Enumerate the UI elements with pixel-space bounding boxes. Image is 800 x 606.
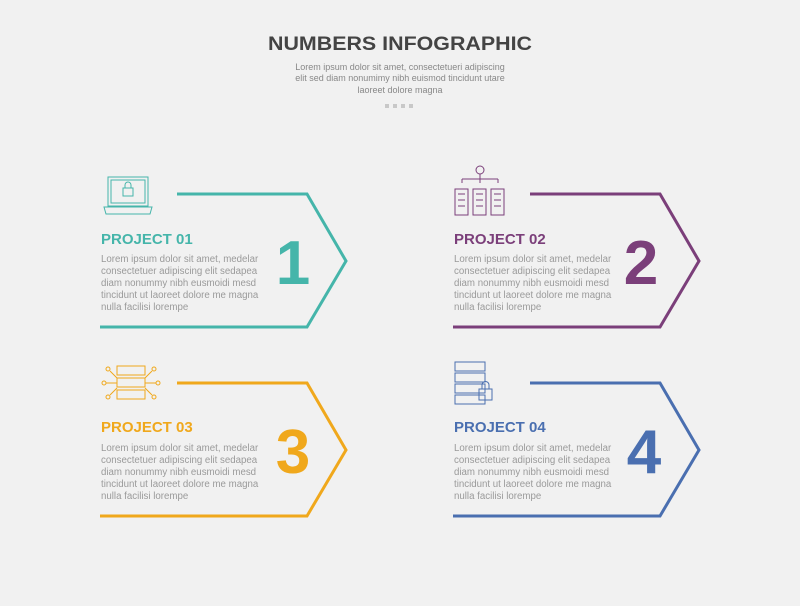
- subtitle: [295, 62, 505, 95]
- title: NUMBERS INFOGRAPHIC: [268, 34, 532, 55]
- body 1: nulla facilisi lorempe: [101, 302, 188, 313]
- body 3: diam nonummy nibh eusmoidi mesd: [101, 467, 256, 478]
- body 3: nulla facilisi lorempe: [101, 491, 188, 502]
- dots: [385, 104, 413, 108]
- body 3: consectetuer adipiscing elit sedapea: [101, 455, 258, 466]
- icon: server network: [102, 366, 160, 399]
- body 2: nulla facilisi lorempe: [454, 302, 541, 313]
- body 4: Lorem ipsum dolor sit amet, medelar: [454, 443, 612, 454]
- body 4: consectetuer adipiscing elit sedapea: [454, 455, 611, 466]
- arrow frame 3: [100, 383, 346, 516]
- number 4: 4: [627, 418, 662, 487]
- panel: project 01: [100, 177, 346, 327]
- panel: project 04: [453, 362, 699, 516]
- subtitle: laoreet dolore magna: [357, 85, 443, 95]
- body 4: nulla facilisi lorempe: [454, 491, 541, 502]
- subtitle: Lorem ipsum dolor sit amet, consectetueri adipiscing: [295, 62, 505, 72]
- number 2: 2: [624, 229, 658, 298]
- icon: laptop lock: [104, 177, 152, 214]
- body 1: [101, 254, 259, 313]
- body 3: Lorem ipsum dolor sit amet, medelar: [101, 443, 259, 454]
- body 4: tincidunt ut laoreet dolore me magna: [454, 479, 612, 490]
- arrow frame 4: [453, 383, 699, 516]
- body 1: Lorem ipsum dolor sit amet, medelar: [101, 254, 259, 265]
- body 1: tincidunt ut laoreet dolore me magna: [101, 290, 259, 301]
- panel: project 03: [100, 366, 346, 516]
- arrow frame 2: [453, 194, 699, 327]
- body 1: consectetuer adipiscing elit sedapea: [101, 266, 258, 277]
- body 2: Lorem ipsum dolor sit amet, medelar: [454, 254, 612, 265]
- number 3: 3: [276, 418, 310, 487]
- body 4: diam nonummy nibh eusmoidi mesd: [454, 467, 609, 478]
- body 1: diam nonummy nibh eusmoidi mesd: [101, 278, 256, 289]
- body 2: diam nonummy nibh eusmoidi mesd: [454, 278, 609, 289]
- subtitle: elit sed diam nonumimy nibh euismod tincidunt utare: [295, 73, 505, 83]
- heading 1: PROJECT 01: [101, 231, 193, 248]
- body 2: consectetuer adipiscing elit sedapea: [454, 266, 611, 277]
- arrow frame 1: [100, 194, 346, 327]
- icon: servers hierarchy: [455, 166, 504, 215]
- number 1: 1: [276, 229, 310, 298]
- body 4: [454, 443, 612, 502]
- heading 4: PROJECT 04: [454, 419, 546, 436]
- heading 2: PROJECT 02: [454, 231, 546, 248]
- panel: project 02: [453, 166, 699, 327]
- body 2: [454, 254, 612, 313]
- heading 3: PROJECT 03: [101, 419, 193, 436]
- body 3: tincidunt ut laoreet dolore me magna: [101, 479, 259, 490]
- body 3: [101, 443, 259, 502]
- body 2: tincidunt ut laoreet dolore me magna: [454, 290, 612, 301]
- icon: server lock: [455, 362, 492, 404]
